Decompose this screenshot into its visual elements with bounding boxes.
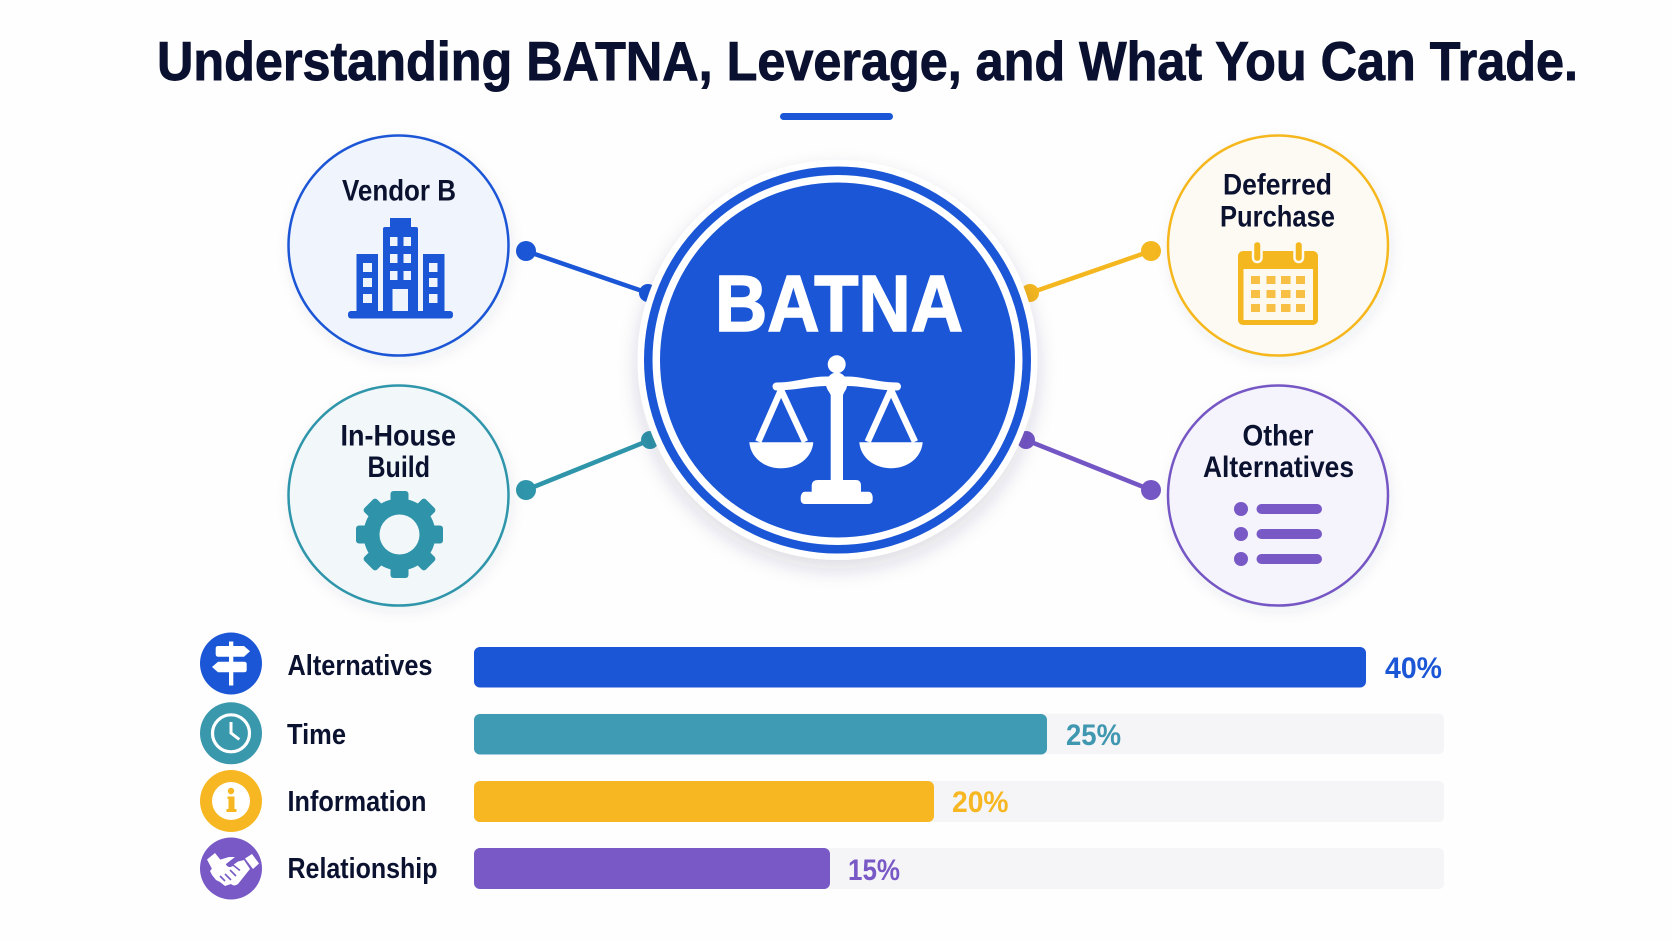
connector: In-House Build to BATNA (516, 431, 659, 500)
icon: signpost (200, 632, 262, 694)
bar: 15% (474, 848, 830, 889)
value: 15%: 15% (848, 854, 900, 887)
label: Relationship: Relationship (288, 853, 438, 885)
label: Deferred Purchase: Deferred (1223, 168, 1332, 202)
value: 20%: 20% (952, 786, 1008, 819)
panel: Deferred Purchase (1168, 136, 1388, 356)
label: Alternatives: Alternatives (288, 650, 432, 682)
BATNA heading: BATNA (715, 259, 963, 348)
bar row: Relationship 15% (200, 838, 1444, 900)
icon: gear (356, 491, 443, 578)
label: Time: Time (287, 719, 346, 751)
icon: calendar (1238, 241, 1318, 325)
connector: Other Alternatives to BATNA (1017, 431, 1161, 500)
bar row: Alternatives 40% (200, 632, 1442, 694)
label: Information: Information (288, 786, 426, 818)
label: In-House Build: Build (368, 451, 430, 484)
panel: Other Alternatives (1168, 386, 1388, 606)
bar: 40% (474, 647, 1366, 688)
panel: In-House Build (288, 386, 508, 606)
connector: Vendor B to BATNA (516, 241, 657, 302)
track (474, 848, 1444, 889)
value: 40%: 40% (1385, 652, 1442, 685)
icon: handshake (200, 838, 262, 900)
panel: central BATNA badge (638, 160, 1038, 560)
icon: office building (348, 218, 453, 318)
icon: clock (200, 702, 262, 764)
track (474, 781, 1444, 822)
value: 25%: 25% (1066, 719, 1121, 752)
bar: 20% (474, 781, 934, 822)
bar row: Information 20% (200, 770, 1444, 832)
title accent rule (780, 113, 893, 120)
icon: balance scales (749, 355, 923, 504)
connector: Deferred Purchase to BATNA (1021, 241, 1161, 302)
icon: list (1234, 502, 1322, 566)
label: Other Alternatives: Other (1242, 420, 1314, 452)
panel: Vendor B (288, 136, 508, 356)
label: Other Alternatives (1203, 420, 1354, 484)
label: In-House Build: In-House (340, 420, 456, 452)
label: In-House Build (340, 420, 456, 484)
icon: info (200, 770, 262, 832)
label: Deferred Purchase (1220, 168, 1335, 234)
bar: 25% (474, 714, 1047, 754)
title: Understanding BATNA, Leverage, and What You Can Trade. (157, 30, 1578, 92)
label: Other Alternatives: Alternatives (1203, 451, 1354, 484)
bar row: Time 25% (200, 702, 1444, 764)
label: Deferred Purchase: Purchase (1220, 200, 1335, 234)
track (474, 714, 1444, 754)
label: Vendor B: Vendor B (342, 174, 456, 208)
